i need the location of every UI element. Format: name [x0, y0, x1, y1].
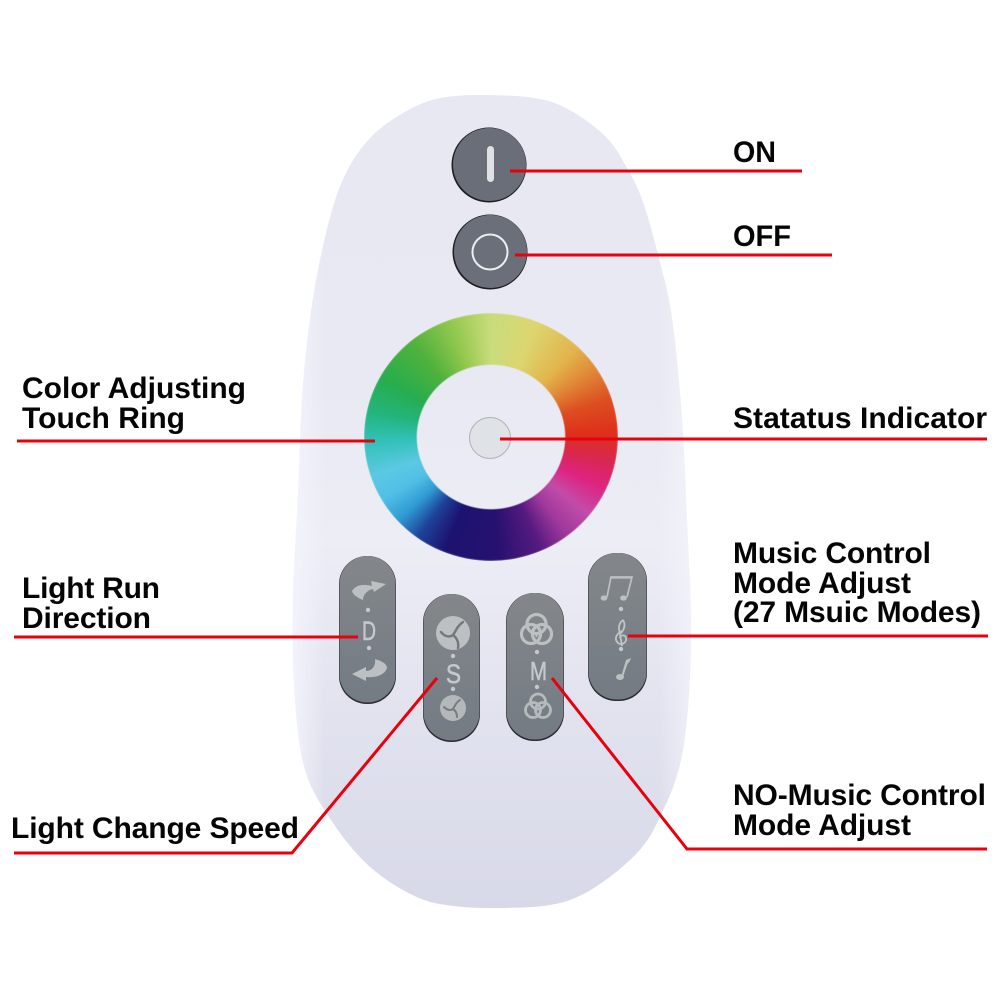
label: no-music control mode adjust: NO-Music Control	[733, 779, 986, 812]
label: no-music control mode adjust: Mode Adjust	[733, 809, 911, 842]
label: status indicator: Statatus Indicator	[733, 402, 987, 435]
label: ON: ON	[733, 136, 776, 169]
icon: small fan	[440, 695, 466, 721]
letter M: M	[530, 656, 547, 686]
label: music control mode adjust: Music Control	[733, 537, 931, 570]
letter S: S	[446, 659, 461, 689]
icon: large fan	[436, 616, 470, 650]
color adjusting touch ring	[364, 313, 618, 561]
icon: left curved arrow	[352, 659, 387, 681]
icon: small three rings	[526, 694, 550, 718]
label: light change speed: Light Change Speed	[11, 812, 299, 845]
letter D: D	[362, 616, 376, 646]
label: OFF: OFF	[733, 220, 791, 253]
icon: beamed notes	[601, 577, 632, 601]
leader lines	[14, 171, 988, 853]
icon: right curved arrow	[352, 581, 386, 600]
button: D light run direction	[339, 556, 396, 704]
button: S light change speed	[423, 594, 480, 742]
icon: single note	[616, 658, 631, 680]
button: OFF	[452, 214, 528, 290]
button: music control	[588, 553, 647, 701]
label: music control mode adjust: (27 Msuic Modes)	[733, 596, 981, 629]
label: color adjusting touch ring: Touch Ring	[22, 402, 185, 435]
icon: treble clef	[616, 620, 626, 646]
label: music control mode adjust	[733, 537, 981, 629]
label: no-music control mode adjust	[733, 779, 986, 842]
label: light run direction: Direction	[22, 602, 151, 635]
label: light run direction: Light Run	[22, 572, 160, 605]
button: M no-music mode	[506, 593, 564, 741]
icon: large three rings	[522, 614, 552, 644]
label: color adjusting touch ring: Color Adjusting	[22, 372, 246, 405]
status indicator	[470, 418, 510, 458]
label: music control mode adjust: Mode Adjust	[733, 567, 911, 600]
label: light run direction	[22, 572, 160, 635]
button: ON	[452, 128, 526, 202]
label: color adjusting touch ring	[22, 372, 246, 435]
